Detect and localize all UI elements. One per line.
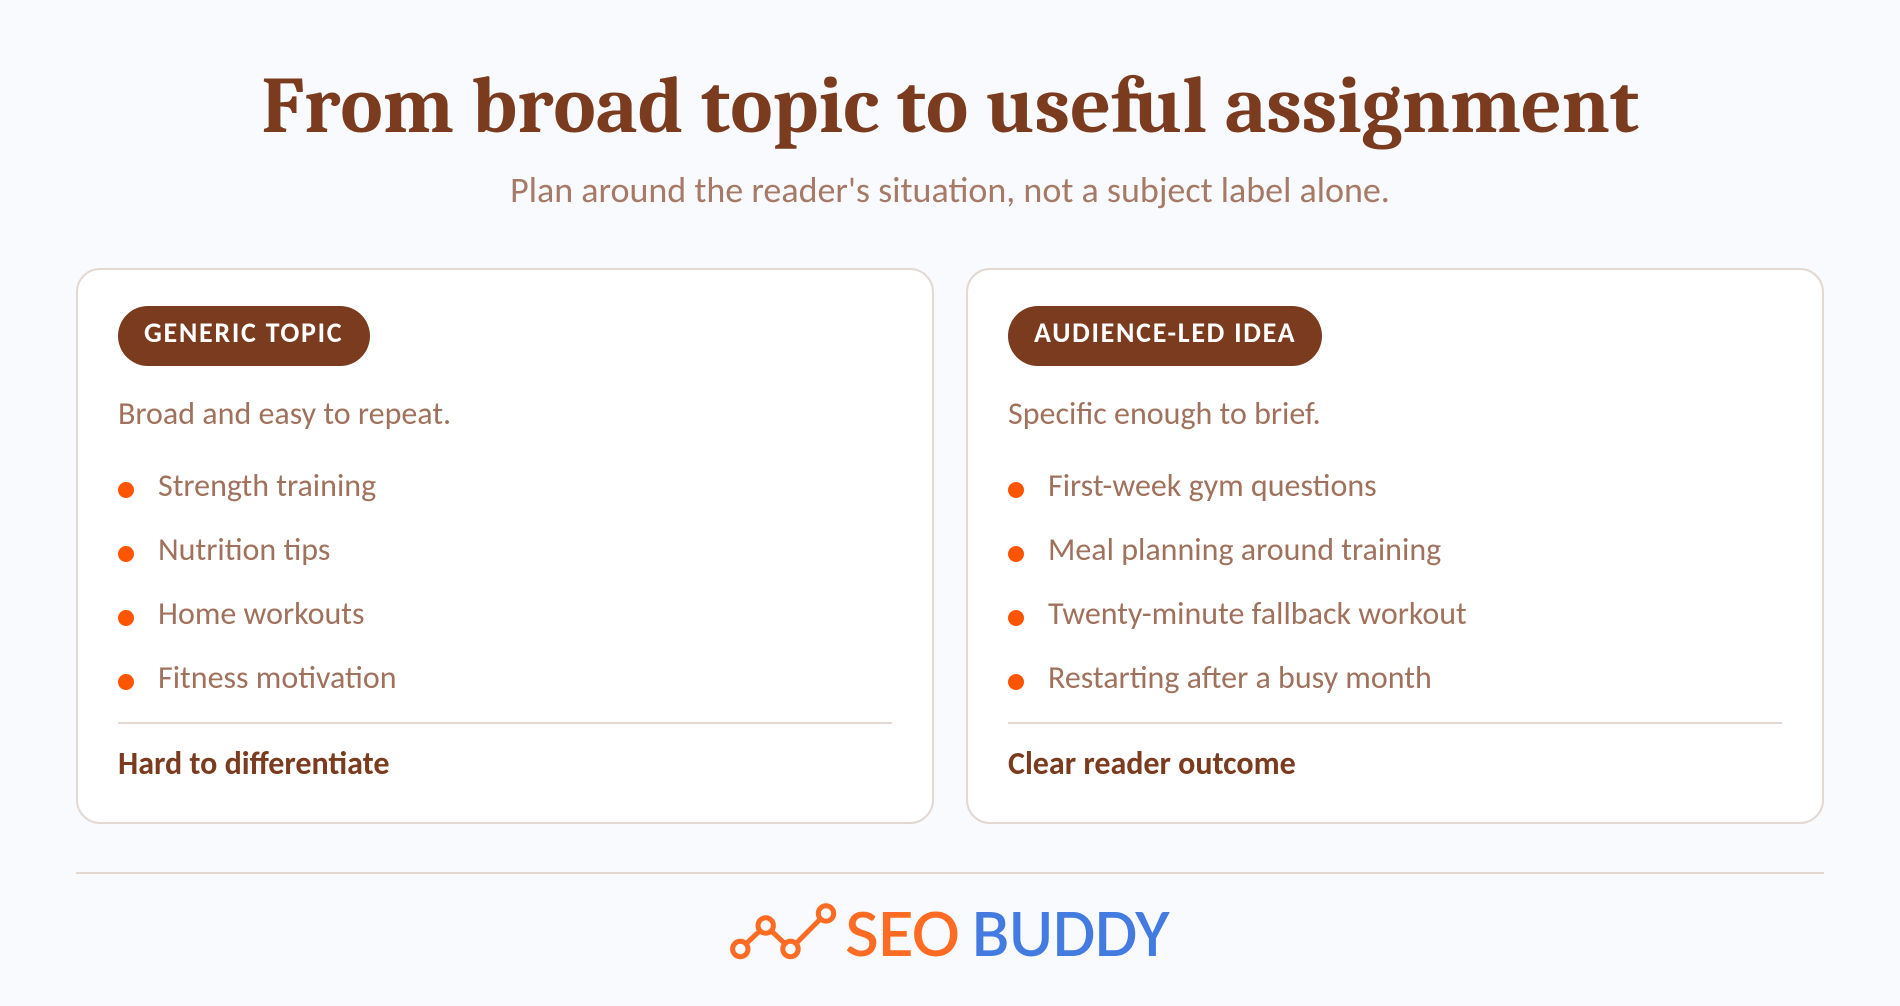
icon: trend line [733,906,834,957]
list item: fallback workout: Twenty-minute fallback workout [1048,594,1467,633]
list item: meal planning: Meal planning around training [1048,530,1441,569]
title: From broad topic to useful assignment [261,60,1639,152]
panel: audience-led idea [966,268,1824,824]
list item: home workouts: Home workouts [158,594,365,633]
panel description: Specific enough to brief. [1008,394,1321,433]
logo: SEO Buddy [730,895,1170,970]
list item: restarting: Restarting after a busy month [1048,658,1432,697]
panel description: Broad and easy to repeat. [118,394,451,433]
panel: generic topic [76,268,934,824]
list item: nutrition tips: Nutrition tips [158,530,330,569]
list item: fitness motivation: Fitness motivation [158,658,397,697]
badge: generic topic: GENERIC TOPIC [144,315,343,350]
badge: audience-led idea [1008,306,1322,366]
list item: first-week gym questions: First-week gym questions [1048,466,1377,505]
badge: audience-led idea: AUDIENCE-LED IDEA [1034,315,1296,350]
panel outcome: Hard to differentiate [118,744,389,783]
subtitle: Plan around the reader's situation, not a subject label alone. [510,168,1390,212]
panel outcome: Clear reader outcome [1008,744,1296,783]
badge: generic topic [118,306,370,366]
logo wordmark [846,892,1169,974]
list item: strength training: Strength training [158,466,376,505]
